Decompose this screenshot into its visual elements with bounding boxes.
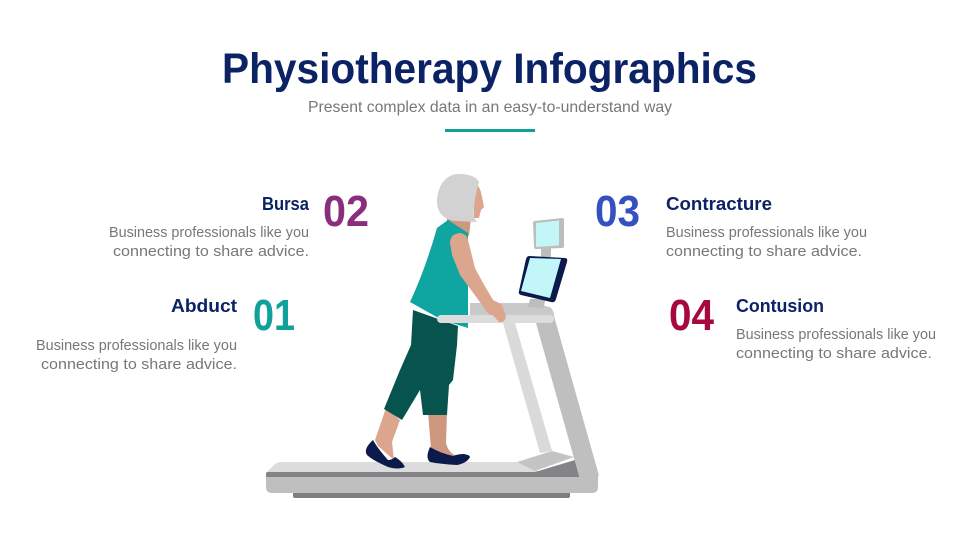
description [109,224,309,260]
right shoe [428,447,470,465]
item 04: Contusion [669,291,936,362]
shirt [410,220,468,328]
description [36,337,237,373]
right leg [428,412,456,458]
description: connecting to share advice. [113,243,309,260]
subtitle: Present complex data in an easy-to-understand way [308,99,672,116]
description [666,224,867,260]
description: connecting to share advice. [666,243,862,260]
description: Business professionals like you [36,337,237,354]
treadmill deck top [266,462,540,473]
description [736,326,936,362]
treadmill base [266,477,598,493]
illustration: woman on treadmill [266,174,599,498]
monitor stem [528,299,545,308]
left shoe [366,440,405,468]
description: Business professionals like you [736,326,936,343]
rear console bar [470,303,554,320]
title: Physiotherapy Infographics [222,45,757,93]
description: connecting to share advice. [736,345,932,362]
treadmill foot [293,492,570,498]
heading: Abduct: Abduct [171,295,237,316]
item 02: Bursa [109,187,369,260]
heading: Contusion: Contusion [736,295,824,316]
handrail [437,315,554,323]
number 04: 04 [669,291,714,340]
item 01: Abduct [36,291,295,373]
treadmill belt shadow [266,460,580,477]
light upright post [501,316,552,453]
neck [447,216,471,236]
hand [487,301,506,322]
description: connecting to share advice. [41,356,237,373]
item 03: Contracture [595,187,867,260]
number 03: 03 [595,187,640,236]
title underline [445,129,535,132]
hair [437,174,479,222]
heading: Contracture: Contracture [666,193,772,214]
pants [384,310,458,420]
heading: Bursa: Bursa [262,193,310,214]
monitor [519,256,567,302]
arm [450,233,506,322]
face [474,182,484,218]
upper screen [533,218,564,257]
number 01: 01 [253,291,295,340]
treadmill ramp [517,451,574,471]
front post [534,316,599,480]
number 02: 02 [323,187,369,236]
left leg [375,408,400,460]
description: Business professionals like you [666,224,867,241]
description: Business professionals like you [109,224,309,241]
